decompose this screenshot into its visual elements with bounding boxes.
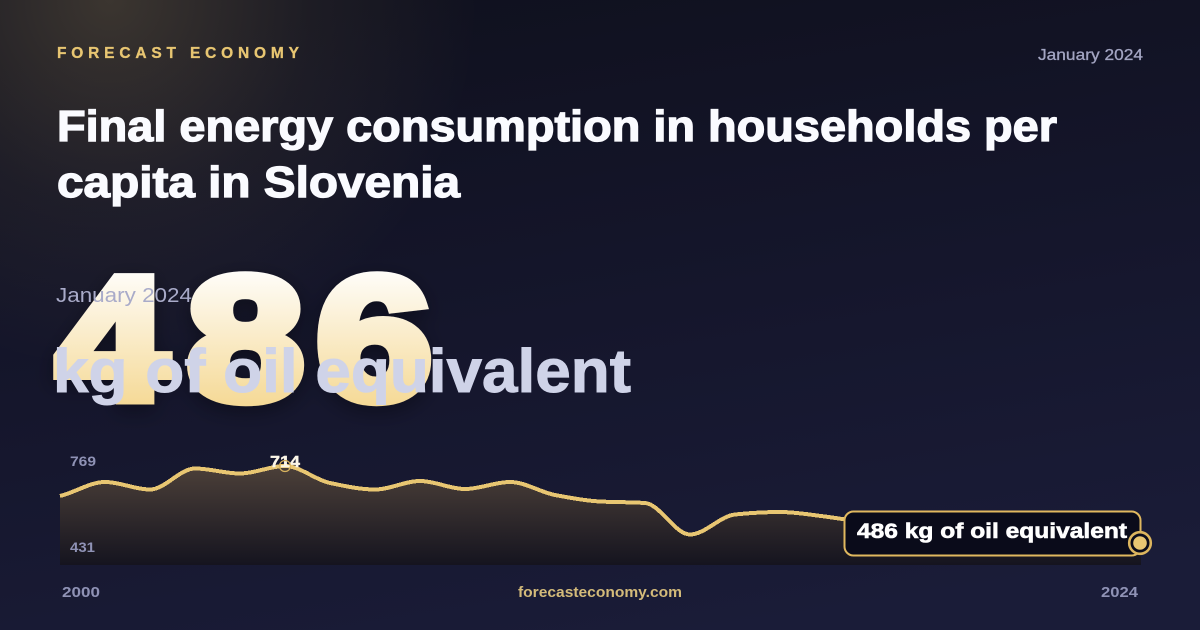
title: Final energy consumption in households per (57, 102, 1057, 151)
date top right: January 2024 (1038, 47, 1143, 64)
peak marker (280, 460, 290, 472)
chart area fill (60, 466, 1141, 565)
axis min label: 431 (70, 540, 96, 555)
end marker (1129, 532, 1151, 554)
eyebrow: brand: FORECAST ECONOMY (57, 45, 300, 62)
unit label: kg of oil equivalent (53, 337, 631, 405)
big number: 4 (56, 242, 168, 437)
date label over number: January 2024 (56, 285, 192, 307)
axis start year: 2000 (62, 585, 100, 601)
title: capita in Slovenia (57, 158, 461, 207)
title (57, 102, 1057, 207)
big number (56, 242, 432, 437)
chart line (60, 466, 1140, 543)
peak value label: 714 (270, 454, 300, 471)
callout: latest value (844, 512, 1140, 556)
axis max label: 769 (70, 454, 96, 469)
axis end year: 2024 (1101, 585, 1138, 601)
big number: 8 (187, 242, 304, 437)
source site: forecasteconomy.com (518, 585, 682, 601)
callout: latest value: 486 kg of oil equivalent (857, 520, 1127, 543)
line chart (60, 454, 1141, 565)
big number: 6 (316, 242, 432, 437)
